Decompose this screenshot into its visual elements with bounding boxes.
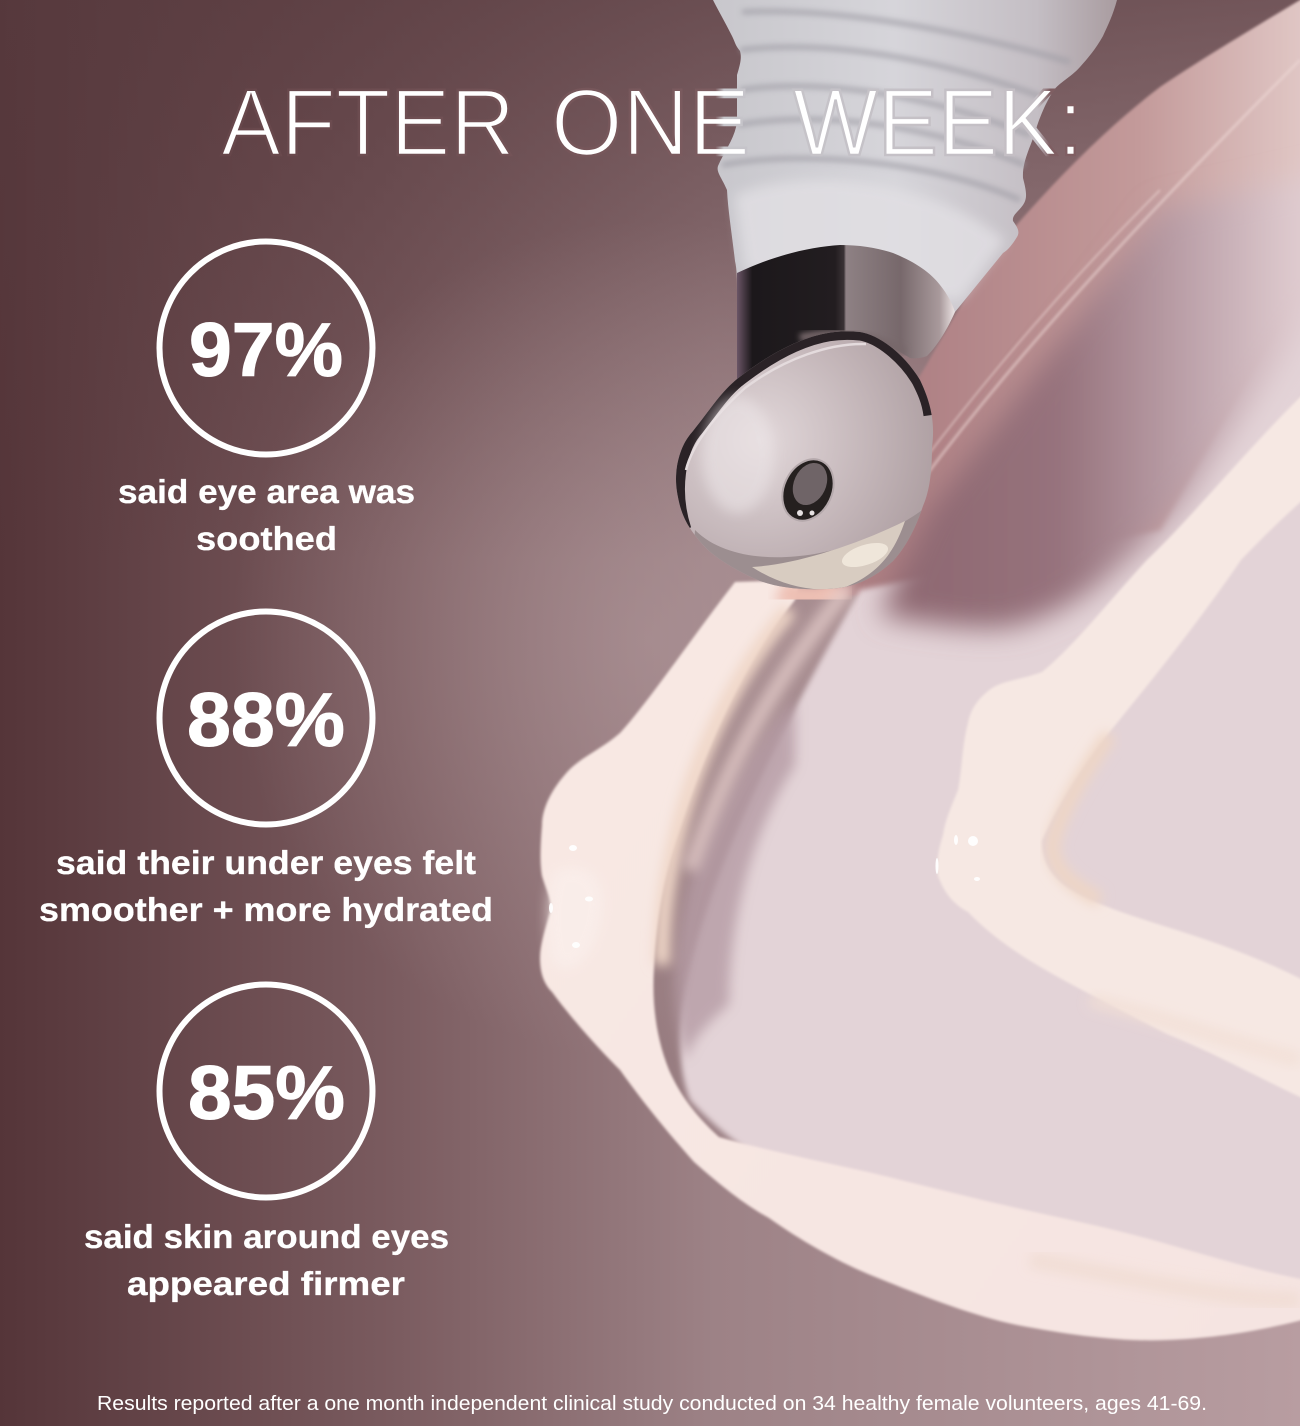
peach inner shade [662,610,790,965]
translucent trail [690,585,850,870]
tube body [713,0,1117,312]
title [221,70,1083,176]
title: ONE [551,70,750,176]
tube ribs [722,11,1070,200]
applicator head [676,331,933,590]
product: tube and applicator [670,0,1117,600]
cream highlights [549,835,980,948]
peach inner shade right [1052,735,1110,900]
shadow along main cream inner edge [675,700,795,1060]
title: AFTER [221,70,515,176]
upper pink band [790,0,1300,640]
streak lights on band [830,60,1300,590]
metal collar [737,245,955,382]
footnote: Results reported after a one month independent clinical study conducted on 34 healthy female volunteers, ages 41-69. [97,1393,1207,1415]
caption 88%: said their under eyes felt [56,844,476,881]
stat: 88%: smoother + more hydrated [39,891,493,928]
applicator hole [773,451,843,529]
circle 88% [160,612,372,824]
stat: 85% [84,984,449,1302]
pink surface with cream smear [540,0,1300,1340]
number 88%: 88% [187,678,345,763]
stat: 97%: soothed [196,520,337,557]
title: WEEK: [793,70,1083,176]
stat: 97% [118,242,415,557]
shadow under the applicator [880,170,1300,628]
circle 85% [160,984,372,1198]
caption 97%: said eye area was [118,473,415,510]
cream stroke: main [540,580,1300,1340]
stat: 88% [39,612,493,928]
dark rim [676,331,932,530]
caption 85%: said skin around eyes [84,1218,449,1255]
tube lower highlight [735,180,1005,300]
stat: 85%: appeared firmer [127,1265,405,1302]
lower pale surface [680,240,1300,1300]
collar top sheen [800,334,905,352]
lower reflection [694,511,921,590]
number 97%: 97% [189,308,343,393]
cream stroke: right [937,360,1300,1115]
number 85%: 85% [188,1051,345,1136]
left highlight [702,397,774,513]
circle 97% [160,242,372,454]
